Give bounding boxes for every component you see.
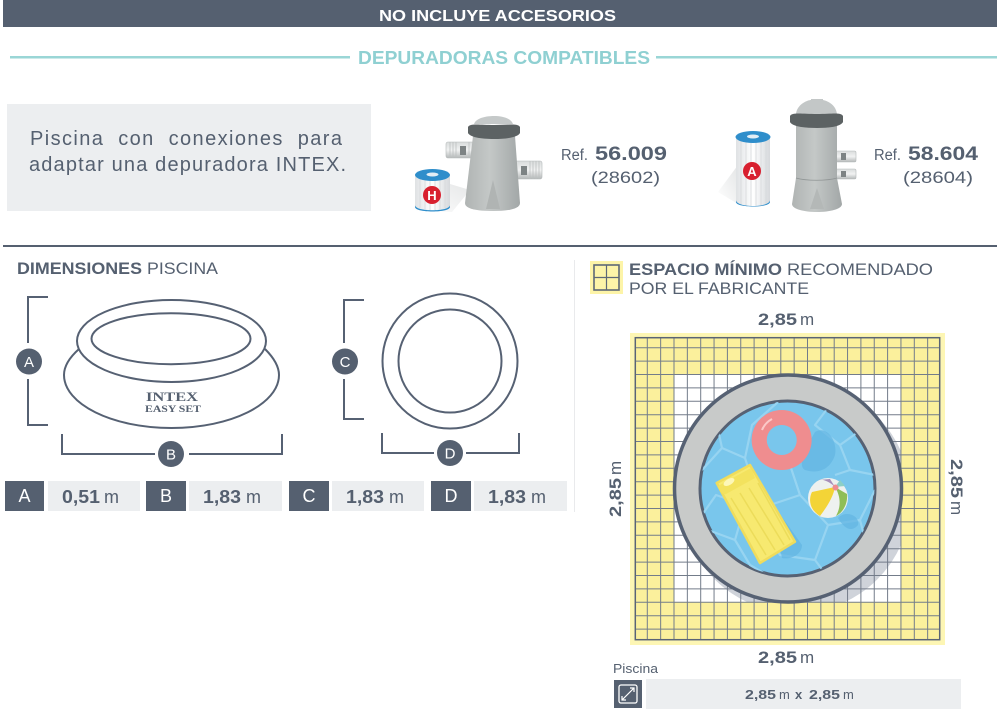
pump lid — [474, 116, 513, 124]
pool logo: EASY SET — [145, 405, 202, 415]
panel: connection note: adaptar una depuradora INTEX. — [29, 154, 346, 176]
pool logo — [145, 390, 202, 415]
pump lid — [796, 99, 837, 114]
dimension A bracket — [16, 297, 48, 425]
heading: espacio minimo: POR EL FABRICANTE — [629, 279, 809, 298]
label: ref 56.009: 56.009 — [595, 144, 667, 165]
heading: dimensiones piscina: PISCINA — [147, 259, 219, 278]
table: dimensions D: 1,83 — [488, 487, 526, 507]
dimension A bracket: A — [24, 354, 34, 371]
table: dimensions C: 1,83 — [346, 487, 384, 507]
dimension label right: 2,85 — [947, 459, 966, 498]
filter H: H — [427, 188, 437, 203]
legend value bar: 2,85 — [745, 687, 776, 702]
dimension label left — [606, 461, 625, 517]
top banner: NO INCLUYE ACCESORIOS — [379, 8, 616, 25]
pump body — [465, 136, 520, 211]
dimension label right — [947, 459, 966, 515]
dimension D bracket: D — [445, 446, 456, 462]
dimension label bottom: 2,85 — [758, 648, 797, 667]
dimension C bracket — [332, 300, 364, 419]
legend value bar — [646, 679, 961, 709]
table: dimensions D: D — [444, 486, 458, 506]
heading: espacio minimo — [629, 260, 933, 298]
grid — [635, 338, 940, 640]
table: dimensions A: A — [18, 486, 31, 506]
pool rim — [674, 375, 902, 602]
dimension B bracket — [62, 434, 282, 467]
dimension label top: m — [800, 310, 814, 329]
swim ring — [752, 410, 812, 470]
label: ref 58.604: (28604) — [903, 168, 973, 187]
dimension label bottom: m — [800, 648, 814, 667]
table: dimensions D — [431, 481, 567, 511]
label: ref 56.009 — [561, 144, 667, 187]
table: dimensions B: B — [160, 486, 172, 506]
dimension label left: m — [606, 461, 625, 475]
dimension label bottom — [758, 648, 814, 667]
table: dimensions B: 1,83 — [203, 487, 241, 507]
icon: pump 28602 with H filter — [412, 116, 542, 212]
pool water — [700, 401, 875, 580]
table: dimensions B: m — [246, 487, 261, 507]
dimension label right: m — [947, 501, 966, 515]
top view of pool — [382, 294, 518, 428]
legend value bar: m — [843, 687, 854, 702]
minimum space plan — [630, 333, 945, 645]
legend value bar: m — [779, 687, 790, 702]
panel: connection note — [7, 104, 371, 211]
icon: minimum space legend — [590, 261, 623, 294]
label: ref 58.604: Ref. — [874, 147, 901, 164]
table: dimensions B — [146, 481, 282, 511]
legend value bar: 2,85 — [809, 687, 840, 702]
side view of pool — [64, 300, 279, 428]
label: ref 56.009: Ref. — [561, 147, 588, 164]
legend label: piscina: Piscina — [613, 662, 658, 676]
heading: depuradoras compatibles: DEPURADORAS COMPATIBLES — [358, 47, 650, 68]
heading: dimensiones piscina: DIMENSIONES — [17, 259, 142, 278]
dimension C bracket: C — [340, 354, 351, 371]
icon: pump 28604 with A filter — [718, 99, 856, 212]
icon: pool size diagonal — [614, 680, 642, 708]
label: ref 58.604: 58.604 — [908, 144, 979, 165]
dimension label left: 2,85 — [606, 478, 625, 517]
table: dimensions A: m — [104, 487, 119, 507]
table: dimensions A: 0,51 — [62, 487, 100, 507]
filter A: A — [747, 164, 757, 179]
table: dimensions A — [5, 481, 140, 511]
air mattress — [717, 465, 795, 563]
label: ref 56.009: (28602) — [591, 168, 660, 187]
top banner — [3, 0, 997, 27]
dimension label top: 2,85 — [758, 310, 797, 329]
table: dimensions C: C — [302, 486, 316, 506]
table: dimensions C — [289, 481, 424, 511]
right hose connector — [514, 161, 542, 179]
table: dimensions C: m — [389, 487, 404, 507]
heading: espacio minimo: RECOMENDADO — [787, 260, 933, 279]
heading: dimensiones piscina — [17, 259, 219, 278]
hose connectors — [836, 151, 856, 179]
legend value bar: x — [795, 687, 803, 702]
label: ref 58.604 — [874, 144, 979, 187]
dimension B bracket: B — [166, 446, 176, 464]
dimension D bracket — [382, 433, 519, 466]
pump body — [792, 125, 842, 212]
left hose connector — [446, 142, 474, 158]
panel: connection note: Piscina con conexiones para — [30, 128, 343, 150]
heading: espacio minimo: ESPACIO MÍNIMO — [629, 260, 782, 279]
dimension label top — [758, 310, 814, 329]
table: dimensions D: m — [531, 487, 546, 507]
beach ball — [808, 478, 848, 518]
pool logo: INTEX — [146, 390, 198, 404]
